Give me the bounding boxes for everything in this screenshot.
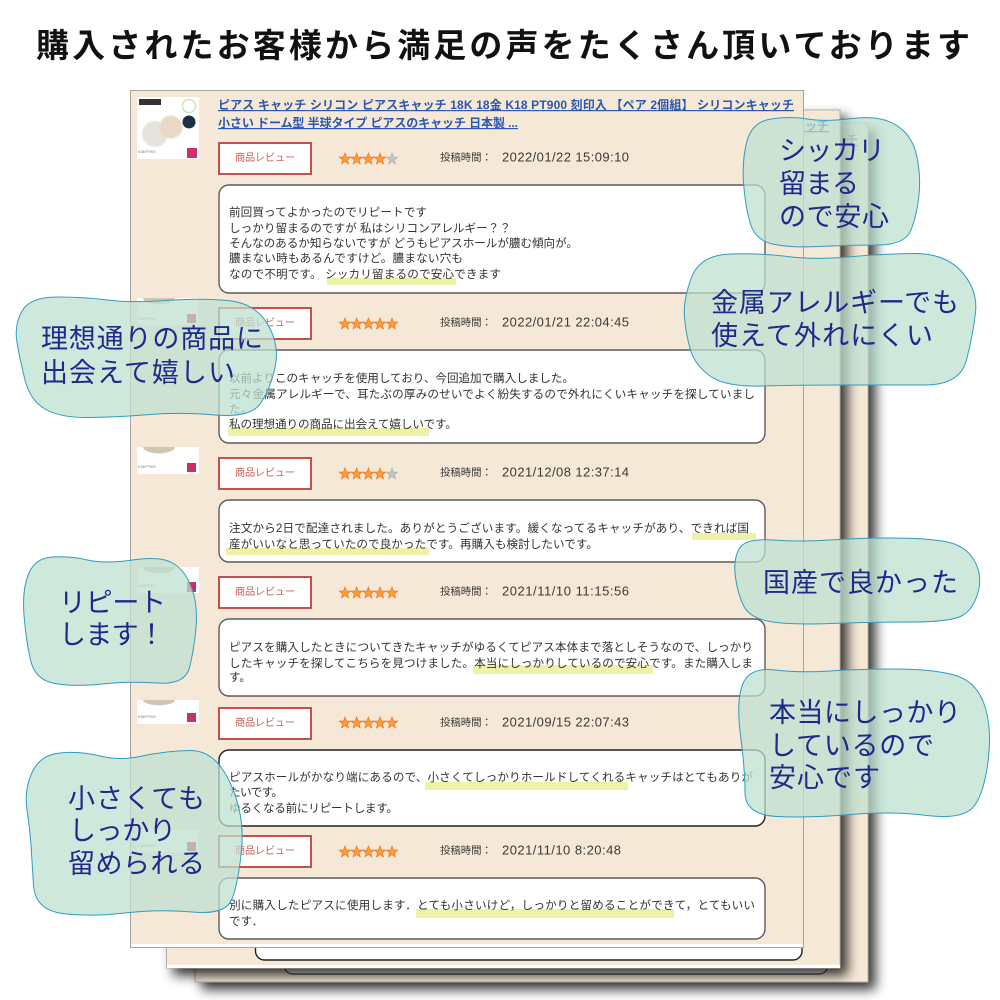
callout: repeat purchase: します！	[59, 620, 165, 650]
callout: really secure: 安心です	[769, 763, 880, 793]
post date: 投稿時間：	[440, 316, 492, 329]
product thumbnail: K18/PT900	[138, 844, 156, 848]
post date: 2022/01/21 22:04:45	[502, 314, 629, 330]
product thumbnail	[137, 830, 199, 852]
back sheet 3: キャッチ	[810, 133, 858, 147]
callout: small but secure: 小さくても	[68, 784, 205, 814]
product thumbnail: K18/PT900	[138, 584, 156, 588]
review button	[219, 836, 311, 867]
star rating	[339, 717, 398, 728]
review text box: 別に購入したピアスに使用します．とても小さいけど，しっかりと留めることができて，とてもいい	[229, 898, 755, 912]
product thumbnail: K18/PT900	[138, 317, 156, 321]
post date: 2021/11/10 11:15:56	[502, 584, 629, 598]
review button: 商品レビュー	[235, 585, 295, 598]
review button: 商品レビュー	[235, 844, 295, 857]
review 2	[137, 298, 765, 443]
callout: metal allergy: 金属アレルギーでも	[711, 288, 959, 318]
product title link: ピアス キャッチ シリコン ピアスキャッチ 18K 18金 K18 PT900 刻印入 【ペア 2個組】 シリコンキャッチ	[218, 97, 794, 112]
review button	[219, 577, 311, 608]
review button: 商品レビュー	[235, 716, 295, 729]
review text box: 注文から2日で配達されました。ありがとうございます。緩くなってるキャッチがあり、できれば国	[229, 521, 749, 535]
star rating	[339, 587, 398, 598]
review text box: た。	[229, 403, 252, 416]
review text box: ピアスホールがかなり端にあるので、小さくてしっかりホールドしてくれるキャッチはとてもありが	[229, 770, 753, 784]
review text box: ピアスを購入したときについてきたキャッチがゆるくてピアス本体まで落としそうなので、しっかり	[229, 640, 753, 654]
callout: secure hold	[743, 118, 920, 247]
review 3	[137, 447, 765, 562]
star rating	[339, 318, 398, 329]
review text box: したキャッチを探してこちらを見つけました。本当にしっかりしているので安心です。また購入しま	[229, 656, 753, 670]
post date: 2022/01/22 15:09:10	[502, 150, 629, 164]
back sheet 2: キャッチ	[781, 119, 829, 133]
post date: 投稿時間：	[440, 844, 492, 857]
post date: 投稿時間：	[440, 151, 492, 164]
review text box: しっかり留まるのですが 私はシリコンアレルギー？？	[229, 221, 511, 235]
star rating	[339, 153, 398, 164]
review button: 商品レビュー	[235, 151, 295, 164]
callout: really secure: 本当にしっかり	[769, 698, 961, 728]
product thumbnail	[137, 567, 199, 593]
star rating	[339, 468, 398, 479]
product thumbnail	[137, 97, 199, 159]
review button	[219, 708, 311, 739]
callout: metal allergy: 使えて外れにくい	[711, 321, 933, 351]
back sheet 2	[166, 110, 840, 968]
review button: 商品レビュー	[235, 466, 295, 479]
review text box: す。	[229, 671, 251, 684]
back sheet 3	[195, 123, 868, 982]
callout: really secure: しているので	[769, 731, 934, 761]
callout: made in Japan: 国産で良かった	[763, 568, 958, 598]
post date	[440, 314, 629, 330]
product title link	[218, 97, 794, 130]
review text box: 膿まない時もあるんですけど。膿まない穴も	[229, 251, 463, 265]
product thumbnail: K18/PT900	[138, 465, 156, 469]
review text box: 前回買ってよかったのでリピートです	[229, 205, 427, 219]
product thumbnail: K18/PT900	[138, 715, 156, 719]
review text box	[219, 750, 765, 826]
post date	[440, 584, 629, 598]
callout: made in Japan	[735, 538, 980, 624]
post date	[440, 464, 629, 480]
review text box: ゆるくなる前にリピートします。	[229, 801, 398, 815]
review text box	[219, 878, 765, 939]
callout: small but secure	[26, 750, 242, 915]
product thumbnail: K18/PT900	[138, 150, 156, 154]
review button	[219, 143, 311, 174]
callout: secure hold: シッカリ	[779, 136, 885, 166]
product thumbnail	[137, 447, 199, 474]
callout: repeat purchase: リピート	[59, 588, 166, 618]
post date: 投稿時間：	[440, 466, 492, 479]
post date: 2021/11/10 8:20:48	[502, 842, 621, 858]
review button	[219, 458, 311, 489]
review text box: 元々金属アレルギーで、耳たぶの厚みのせいでよく紛失するので外れにくいキャッチを探していまし	[229, 387, 755, 401]
review 1	[137, 97, 765, 293]
post date	[440, 150, 629, 164]
callout: really secure	[739, 669, 990, 817]
post date: 投稿時間：	[440, 716, 492, 729]
post date: 投稿時間：	[440, 585, 492, 598]
review text box	[219, 185, 765, 293]
callout: repeat purchase	[24, 557, 196, 685]
callout: small but secure: しっかり	[69, 816, 176, 846]
review text box	[219, 500, 765, 562]
product thumbnail	[137, 298, 199, 325]
post date: 2021/12/08 12:37:14	[502, 464, 629, 480]
review 4	[137, 567, 765, 696]
callout: secure hold: ので安心	[779, 202, 889, 232]
review button	[219, 308, 311, 339]
review text box: です．	[229, 915, 263, 928]
post date	[440, 714, 629, 730]
callout: secure hold: 留まる	[779, 169, 859, 199]
callout: ideal product	[16, 297, 276, 418]
review text box	[219, 350, 765, 443]
front review sheet	[130, 90, 804, 948]
review text box: そんなのあるか知らないですが どうもピアスホールが膿む傾向が。	[229, 236, 578, 250]
post date	[440, 842, 621, 858]
callout: ideal product: 出会えて嬉しい	[41, 358, 235, 388]
review button: 商品レビュー	[235, 316, 295, 329]
review text box: 以前よりこのキャッチを使用しており、今回追加で購入しました。	[229, 371, 574, 385]
review 6	[137, 830, 765, 939]
star rating	[339, 846, 398, 857]
review text box: 産がいいなと思っていたので良かったです。再購入も検討したいです。	[229, 537, 598, 551]
post date: 2021/09/15 22:07:43	[502, 714, 629, 730]
product title link: 小さい ドーム型 半球タイプ ピアスのキャッチ 日本製 ...	[218, 115, 518, 130]
review text box: 私の理想通りの商品に出会えて嬉しいです。	[229, 417, 457, 431]
callout: small but secure: 留められる	[68, 849, 205, 879]
callout: ideal product: 理想通りの商品に	[41, 324, 263, 354]
review text box: たいです。	[229, 786, 283, 799]
callout: metal allergy	[684, 253, 976, 386]
review 5	[137, 700, 765, 826]
review text box	[219, 619, 765, 696]
product thumbnail	[137, 700, 199, 724]
review text box: なので不明です。 シッカリ留まるので安心できます	[229, 268, 501, 281]
title: 購入されたお客様から満足の声をたくさん頂いております	[36, 27, 970, 64]
